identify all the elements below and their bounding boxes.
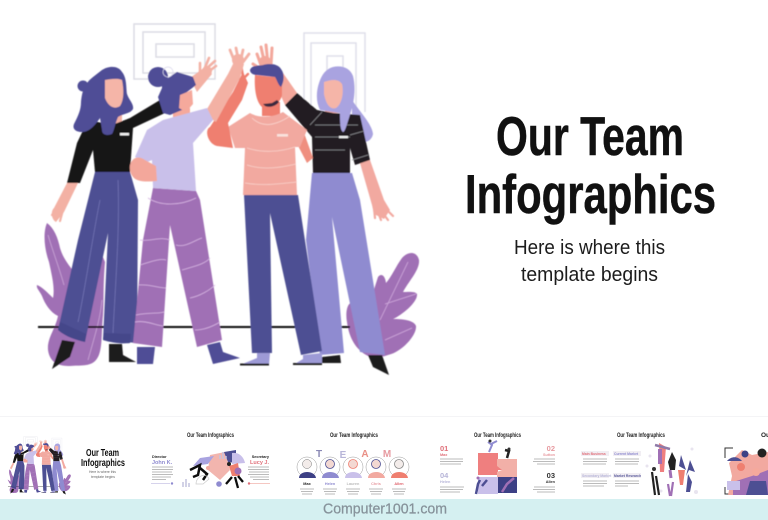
woman 2: lilac top bbox=[130, 48, 249, 364]
thumbnail 2: director and secretary bbox=[151, 432, 270, 488]
thumbnail 4 left items: 04 bbox=[440, 471, 449, 480]
thumbnail 1 title bbox=[81, 448, 125, 469]
thumbnail 2 right profile: Lucy J. bbox=[250, 460, 269, 466]
thumbnail 4 right items: 03 bbox=[547, 471, 555, 480]
thumbnail 2 right profile: Secretary bbox=[252, 455, 270, 459]
thumbnail 1: cover slide bbox=[8, 437, 125, 494]
main illustration: team high five bbox=[37, 24, 419, 375]
thumbnail 2 left profile: Director bbox=[152, 455, 167, 459]
thumbnail 4 left items: Helen bbox=[440, 480, 451, 484]
thumbnail 5: team letters bbox=[581, 432, 698, 496]
woman 3: lilac hair bbox=[253, 45, 393, 375]
watermark bar bbox=[0, 499, 768, 520]
thumbnail 3 avatars bbox=[297, 457, 409, 478]
thumbnail 4 left items: 01 bbox=[440, 444, 448, 453]
thumbnail 3 names: Allen bbox=[394, 482, 404, 486]
thumbnail 1 illustration bbox=[8, 437, 71, 494]
subtitle: template begins bbox=[521, 264, 658, 286]
thumbnail 3 TEAM letters: M bbox=[383, 449, 391, 460]
thumbnail 2 left profile bbox=[151, 455, 173, 485]
thumbnail 3 TEAM letters: A bbox=[361, 449, 369, 460]
thumbnail 4: puzzle bbox=[440, 432, 521, 494]
thumbnail 4 right items: Allen bbox=[546, 480, 556, 484]
thumbnail 4 left items: Max bbox=[440, 453, 448, 457]
left plant bbox=[37, 223, 105, 366]
thumbnail 4 right items bbox=[533, 444, 556, 492]
thumbnail 2 title: Our Team Infographics bbox=[187, 432, 234, 439]
subtitle bbox=[514, 237, 665, 286]
woman 1: dark top bbox=[52, 58, 216, 369]
thumbnail 3 names: Chris bbox=[371, 482, 381, 486]
thumbnail 4 title: Our Team Infographics bbox=[474, 432, 521, 439]
ground line bbox=[38, 326, 350, 328]
thumbnail 3 TEAM letters bbox=[316, 449, 391, 461]
thumbnail 5 text cards bbox=[581, 451, 641, 486]
thumbnail 3 title: Our Team Infographics bbox=[330, 432, 378, 439]
thumbnail 5 text cards: Current Market bbox=[614, 452, 639, 456]
title bbox=[465, 105, 716, 225]
thumbnail 6 illustration bbox=[725, 448, 768, 495]
thumbnail 3 names bbox=[303, 482, 404, 486]
title: Our Team bbox=[496, 105, 684, 167]
thumbnail strip divider bbox=[0, 416, 768, 417]
thumbnail 1 subtitle: Here is where this bbox=[89, 470, 116, 474]
thumbnail 5 text cards: Main Business bbox=[582, 452, 606, 456]
thumbnail 2 right profile bbox=[248, 455, 270, 485]
thumbnail 3 TEAM letters: T bbox=[316, 449, 322, 460]
thumbnail strip bbox=[8, 432, 768, 496]
thumbnail 4 puzzle illustration bbox=[476, 440, 517, 494]
thumbnail 1 subtitle bbox=[89, 470, 116, 479]
thumbnail 6: partial photo frame bbox=[725, 432, 768, 495]
watermark text: Computer1001.com bbox=[323, 500, 447, 518]
thumbnail 2 left profile: John K. bbox=[152, 460, 173, 466]
left wall frame bbox=[134, 24, 215, 79]
thumbnail 1 subtitle: template begins bbox=[91, 475, 115, 479]
thumbnail 4 right items: 02 bbox=[547, 444, 555, 453]
thumbnail 3: five avatars bbox=[297, 432, 409, 494]
thumbnail 3 names: Max bbox=[303, 482, 312, 486]
thumbnail 3 names: Lauren bbox=[347, 482, 360, 486]
thumbnail 4 right items: Sutton bbox=[543, 453, 556, 457]
thumbnail 5 title: Our Team Infographics bbox=[617, 432, 665, 439]
thumbnail 4 left items bbox=[440, 444, 464, 492]
thumbnail 5 text cards: Market Research bbox=[614, 474, 641, 478]
subtitle: Here is where this bbox=[514, 237, 665, 259]
thumbnail 3 TEAM letters: E bbox=[340, 450, 347, 461]
thumbnail 3 names: Helen bbox=[325, 482, 336, 486]
right wall frame bbox=[304, 33, 365, 112]
thumbnail 5 text cards: Secondary Market bbox=[582, 474, 612, 478]
thumbnail 1 title: Our Team bbox=[86, 448, 119, 459]
thumbnail 1 title: Infographics bbox=[81, 458, 125, 469]
right plant bbox=[346, 253, 419, 357]
thumbnail 2 center illustration bbox=[183, 450, 245, 488]
thumbnail 5 TEAM figures bbox=[646, 443, 698, 496]
man: pink shirt bbox=[207, 64, 322, 366]
